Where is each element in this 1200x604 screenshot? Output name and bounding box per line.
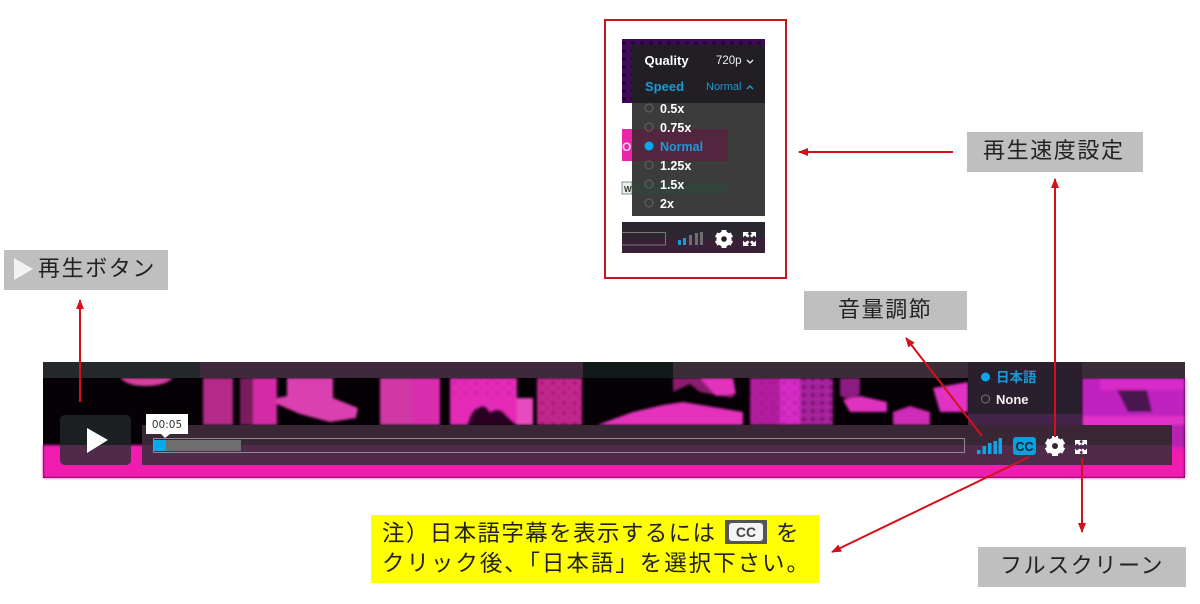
panel: settings menu screenshot: 720p xyxy=(716,55,742,67)
label: volume: 音量調節 xyxy=(838,297,932,322)
progress track xyxy=(154,438,964,452)
note: subtitles: 注）日本語字幕を表示するには xyxy=(382,521,715,546)
video player strip xyxy=(43,362,1185,478)
red frame xyxy=(605,20,786,278)
video frame artwork xyxy=(43,378,1185,478)
icon: volume bars xyxy=(977,438,1002,454)
icon: cc badge xyxy=(725,520,767,544)
menu control bar xyxy=(622,222,765,238)
speed options: 2x xyxy=(660,197,674,211)
label: play button xyxy=(4,250,168,290)
play button xyxy=(60,415,131,465)
label: fullscreen: フルスクリーン xyxy=(1000,553,1164,578)
note: subtitles: クリック後、「日本語」を選択下さい。 xyxy=(382,551,809,576)
icon: settings gear xyxy=(1045,436,1065,456)
label: playback speed: 再生速度設定 xyxy=(983,138,1125,163)
note: subtitles xyxy=(371,515,819,583)
icon: closed captions: CC xyxy=(1016,439,1034,454)
panel: settings menu screenshot: OI xyxy=(622,140,635,154)
arrow: to play button xyxy=(79,300,81,402)
arrow: to volume label xyxy=(906,338,982,436)
note: subtitles: を xyxy=(776,521,799,546)
label: playback speed xyxy=(967,132,1143,172)
menu panel xyxy=(632,45,765,103)
speed options: 1.25x xyxy=(660,159,691,173)
time tooltip: 00:05 xyxy=(152,419,182,431)
buffered bar xyxy=(160,440,241,451)
icon: closed captions xyxy=(1013,437,1036,455)
top caption strip xyxy=(43,362,200,378)
speed options: Normal xyxy=(660,140,703,154)
speed options: 0.5x xyxy=(660,102,684,116)
speed options: 1.5x xyxy=(660,178,684,192)
icon: fullscreen xyxy=(1075,440,1087,454)
subtitle menu xyxy=(968,362,1082,425)
label: play button: 再生ボタン xyxy=(38,256,156,281)
panel: settings menu screenshot: Normal xyxy=(706,81,741,93)
time tooltip xyxy=(146,414,188,438)
speed options xyxy=(644,102,703,211)
label: volume xyxy=(804,291,967,330)
speed options: 0.75x xyxy=(660,121,691,135)
speed row: Speed xyxy=(645,79,684,94)
menu background video xyxy=(622,39,765,103)
arrow: to speed label xyxy=(1054,179,1056,437)
panel: settings menu screenshot xyxy=(605,20,786,278)
arrow: to settings menu xyxy=(799,151,953,153)
control bar xyxy=(142,425,1172,465)
played bar xyxy=(154,440,166,451)
subtitle menu: None xyxy=(996,392,1028,407)
icon: cc badge: CC xyxy=(736,524,756,540)
quality row: Quality xyxy=(644,53,689,68)
subtitle menu: 日本語 xyxy=(996,369,1037,385)
arrow: cc to note xyxy=(832,457,1029,552)
panel: settings menu screenshot: W xyxy=(624,185,632,194)
arrow: to fullscreen label xyxy=(1081,458,1083,532)
label: fullscreen xyxy=(978,547,1186,587)
